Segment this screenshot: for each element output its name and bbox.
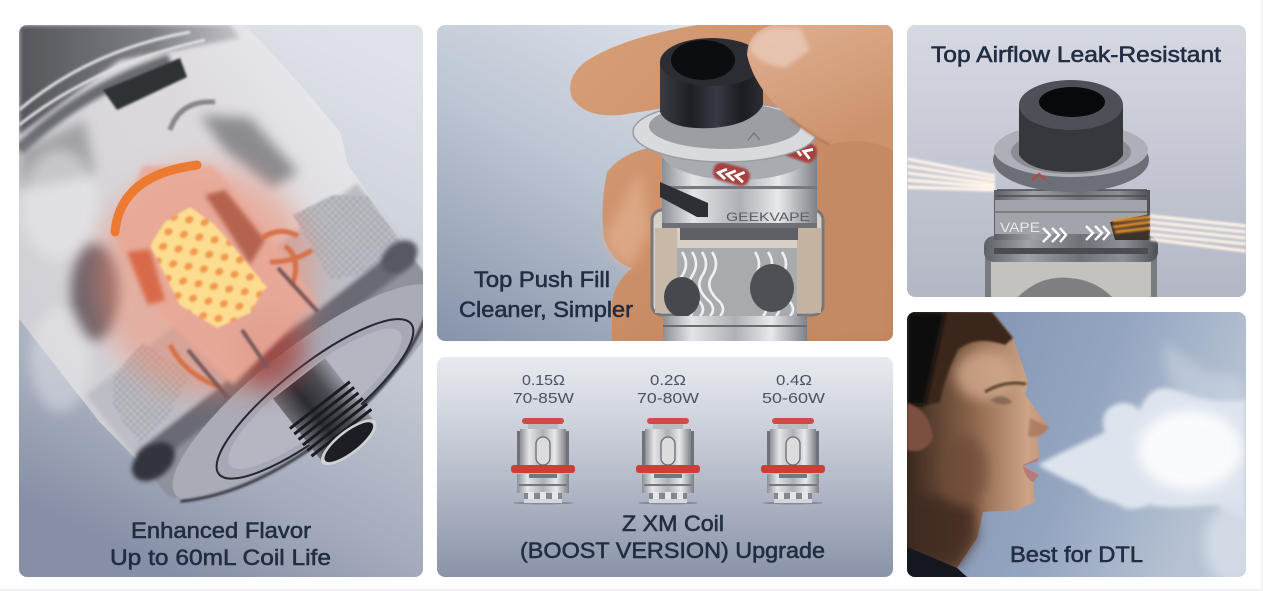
illustration: vapor cloud <box>1038 346 1246 577</box>
icon: dark collar <box>907 547 967 577</box>
panel: enhanced flavor <box>19 25 423 577</box>
panel: top push fill <box>437 25 893 341</box>
icon: ear <box>907 403 933 451</box>
icon: tank with drip tip: VAPE <box>1000 219 1040 235</box>
icon: right airflow streaks <box>1113 216 1246 251</box>
coil 0.2 ohm: 70-80W <box>637 390 700 407</box>
coil 0.2 ohm: 0.2Ω <box>650 372 686 389</box>
panel: Z XM coil <box>437 357 893 577</box>
heading: top push fill: Top Push Fill <box>474 267 610 292</box>
heading: enhanced flavor: Enhanced Flavor <box>131 518 311 543</box>
icon: right knurled band <box>293 195 403 280</box>
icon: thumb with nail <box>747 25 893 150</box>
heading: Z XM coil upgrade <box>520 511 825 563</box>
icon: black drip tip <box>660 38 764 128</box>
coil 0.15 ohm: 0.15Ω <box>522 372 565 389</box>
panel: best for DTL <box>907 312 1260 585</box>
icon: threaded connector <box>273 358 376 465</box>
heading: Z XM coil upgrade: (BOOST VERSION) Upgrade <box>520 538 825 563</box>
coil 0.2 ohm <box>636 372 700 504</box>
icon: base plate <box>128 237 423 504</box>
icon: left airflow streaks <box>907 159 995 190</box>
icon: glowing honeycomb mesh <box>150 207 267 328</box>
illustration: man in profile exhaling <box>907 312 1049 577</box>
heading: top push fill <box>459 267 633 322</box>
coil 0.4 ohm: 0.4Ω <box>776 372 812 389</box>
icon: left knurled band <box>113 343 190 445</box>
coil 0.4 ohm: 50-60W <box>762 390 826 407</box>
heading: enhanced flavor: Up to 60mL Coil Life <box>110 545 331 570</box>
icon: glass tank with pattern chimney <box>652 210 823 341</box>
icon: top collar with GEEKVAPE engraving <box>660 142 817 228</box>
coil 0.15 ohm <box>511 372 575 504</box>
icon: red chevron fill badges <box>712 142 818 187</box>
icon: silver flange ring <box>633 102 817 162</box>
icon: top collar with GEEKVAPE engraving: GEEKVAPE <box>726 210 810 224</box>
coil 0.15 ohm: 70-85W <box>513 390 575 407</box>
icon: coil housing with orange ring <box>113 165 318 398</box>
heading: enhanced flavor <box>110 518 331 570</box>
heading: Z XM coil upgrade: Z XM Coil <box>622 511 724 536</box>
heading: best for DTL: Best for DTL <box>1010 542 1143 567</box>
coil 0.4 ohm <box>761 372 826 504</box>
heading: top airflow leak-resistant: Top Airflow Leak-Resistant <box>931 42 1221 67</box>
icon: hair <box>907 312 1013 410</box>
illustration: tilted tank cutaway <box>19 25 423 504</box>
panel: top airflow <box>907 25 1246 297</box>
icon: tank with drip tip <box>984 80 1158 297</box>
illustration: hand holding tank <box>570 25 893 341</box>
heading: top push fill: Cleaner, Simpler <box>459 297 633 322</box>
